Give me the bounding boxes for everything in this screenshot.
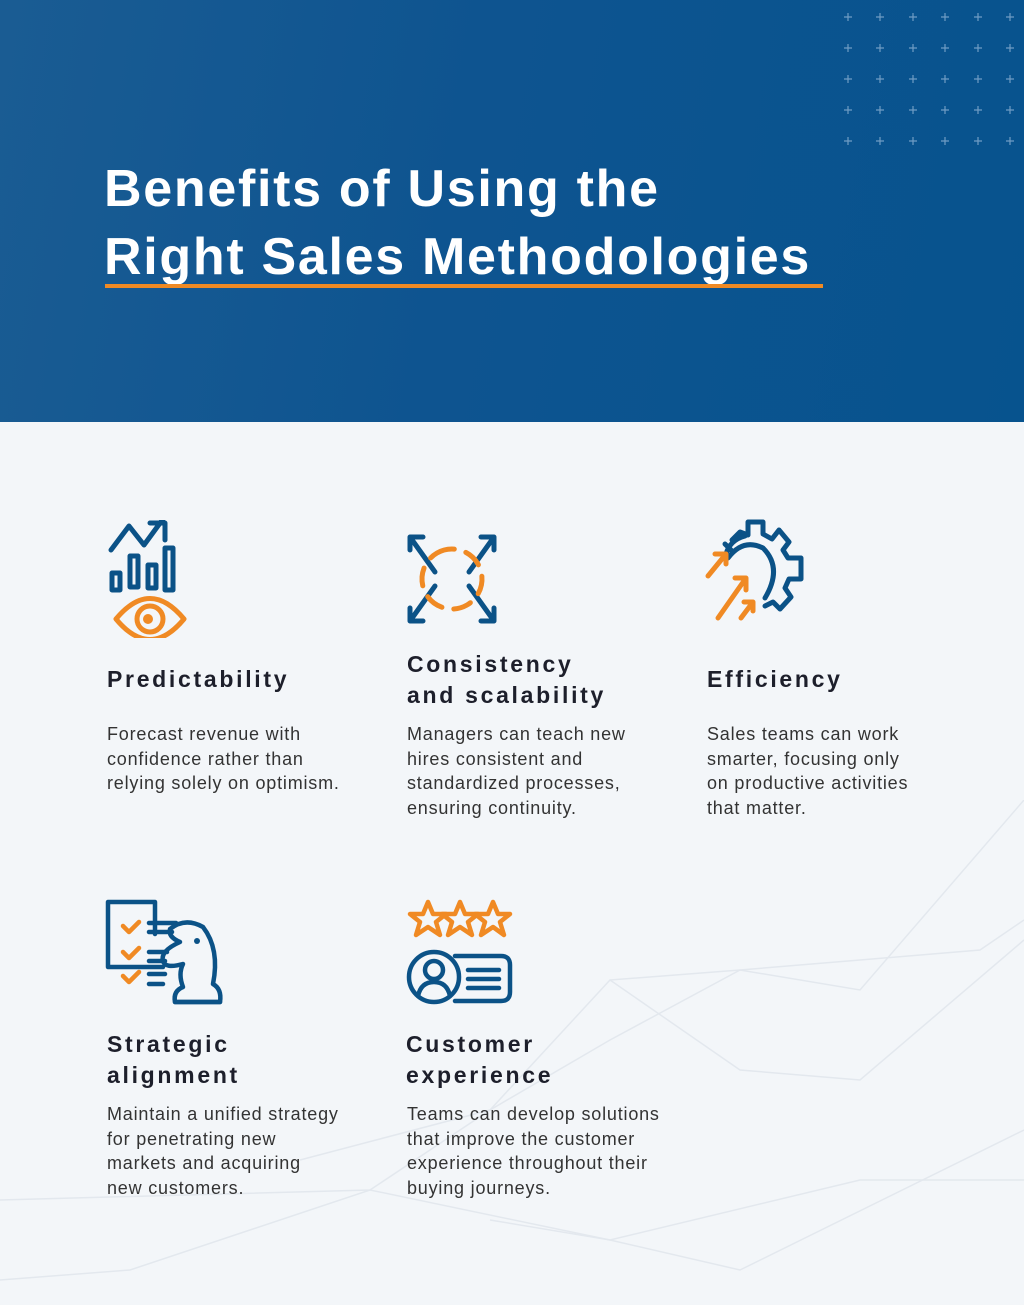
header panel xyxy=(0,0,1024,422)
text: confidence rather than xyxy=(107,748,304,768)
text: relying solely on optimism. xyxy=(107,773,340,793)
text xyxy=(407,1104,660,1198)
heading xyxy=(406,1031,553,1088)
heading: Consistency xyxy=(407,651,573,677)
text: Teams can develop solutions xyxy=(407,1104,660,1124)
text: ensuring continuity. xyxy=(407,798,577,818)
title: Right Sales Methodologies xyxy=(104,228,811,286)
heading: Strategic xyxy=(107,1031,230,1057)
title: Benefits of Using the xyxy=(104,160,660,218)
decorative plus grid xyxy=(844,13,1014,145)
text: hires consistent and xyxy=(407,748,583,768)
heading: experience xyxy=(406,1062,553,1088)
text: Forecast revenue with xyxy=(107,724,301,744)
text: buying journeys. xyxy=(407,1178,551,1198)
icon: stars and profile card xyxy=(406,900,512,1004)
text: that improve the customer xyxy=(407,1128,635,1148)
text: Maintain a unified strategy xyxy=(107,1104,339,1124)
panel: predictability xyxy=(107,666,340,793)
text: for penetrating new xyxy=(107,1128,276,1148)
text xyxy=(707,724,908,818)
text: markets and acquiring xyxy=(107,1153,301,1173)
text: that matter. xyxy=(707,798,807,818)
text: Sales teams can work xyxy=(707,724,899,744)
text xyxy=(107,724,340,793)
title underline xyxy=(105,284,823,288)
panel: consistency xyxy=(407,651,626,818)
text: experience throughout their xyxy=(407,1153,648,1173)
background line chart decoration xyxy=(0,800,1024,1280)
text: Managers can teach new xyxy=(407,724,626,744)
text xyxy=(407,724,626,818)
icon: chart with eye xyxy=(108,520,187,638)
title xyxy=(104,160,811,286)
icon: gear with arrows xyxy=(706,520,804,620)
text: on productive activities xyxy=(707,773,908,793)
panel: strategic alignment xyxy=(107,1031,339,1198)
text: standardized processes, xyxy=(407,773,621,793)
panel: efficiency xyxy=(707,666,908,818)
text xyxy=(107,1104,339,1198)
heading: Efficiency xyxy=(707,666,843,692)
heading xyxy=(107,1031,240,1088)
text: new customers. xyxy=(107,1178,244,1198)
panel: customer experience xyxy=(406,1031,660,1198)
heading: Predictability xyxy=(107,666,289,692)
text: smarter, focusing only xyxy=(707,748,900,768)
heading: Customer xyxy=(406,1031,535,1057)
icon: expand arrows xyxy=(408,534,496,624)
icon: checklist with knight xyxy=(106,900,223,1004)
heading: alignment xyxy=(107,1062,240,1088)
heading: and scalability xyxy=(407,682,606,708)
heading xyxy=(407,651,606,708)
